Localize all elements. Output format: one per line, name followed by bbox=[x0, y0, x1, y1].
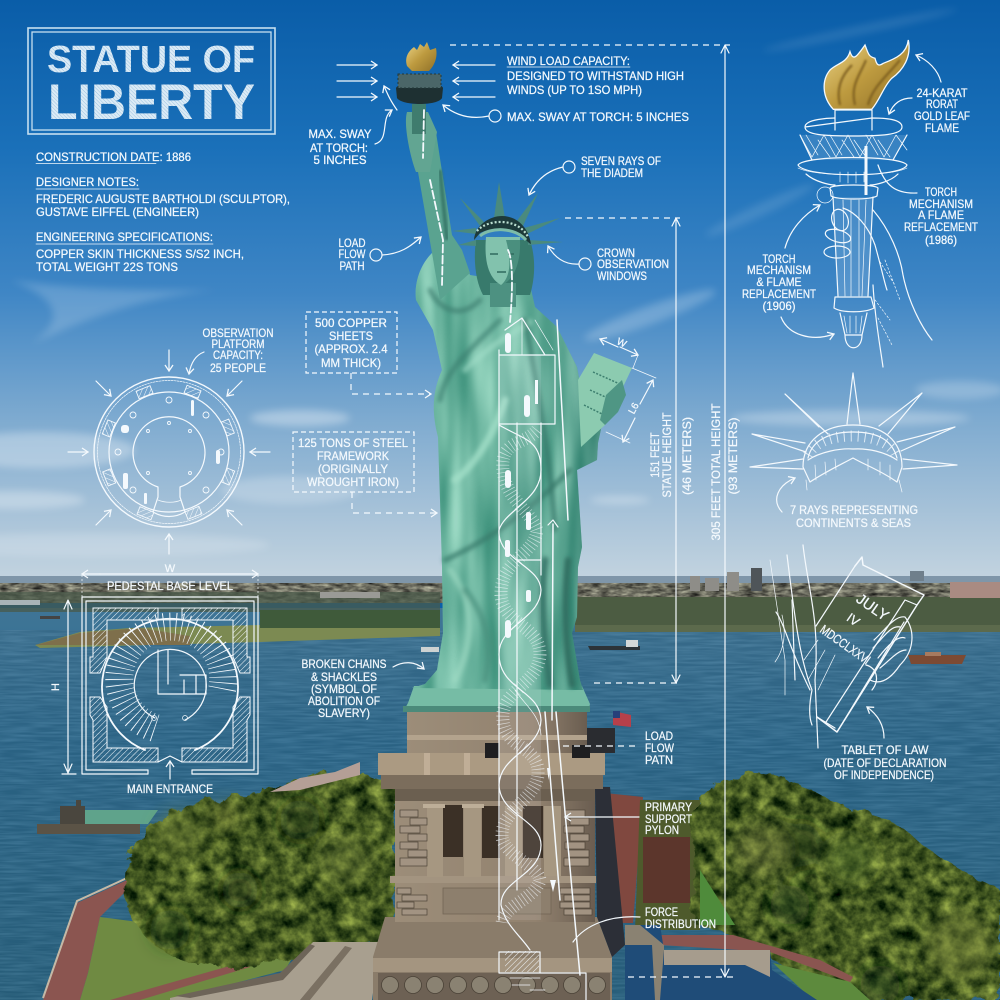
total height dimension: (93 METERS) bbox=[726, 418, 740, 494]
trees left bbox=[124, 772, 395, 968]
face bbox=[486, 237, 520, 285]
tablet label: (DATE OF DECLARATION bbox=[824, 756, 946, 770]
distant hills bbox=[0, 576, 1000, 584]
gold leaf label: RORAT bbox=[926, 97, 959, 111]
pedestal load flow label: FLOW bbox=[645, 741, 675, 755]
body and drapery bbox=[412, 250, 603, 690]
lawn left bbox=[80, 917, 300, 1000]
frame lines bbox=[499, 318, 555, 920]
tablet inscription bbox=[817, 590, 892, 667]
tablet label bbox=[824, 707, 946, 782]
crown windows callout: WINDOWS bbox=[597, 269, 647, 283]
sway callout left bbox=[308, 86, 397, 167]
clouds bbox=[0, 5, 1000, 557]
spiral stairs bbox=[501, 430, 540, 925]
copper sheets callout bbox=[306, 312, 431, 394]
pedestal base plan: PEDESTAL BASE LEVEL bbox=[107, 579, 233, 593]
foreground left: pier bbox=[37, 800, 158, 834]
steps left bbox=[170, 942, 380, 1000]
load-marked handle bbox=[864, 146, 868, 195]
mechanism label left: (1906) bbox=[762, 299, 796, 313]
force distribution label: DISTRIBUTION bbox=[645, 917, 716, 931]
primary support pylon label: SUPPORT bbox=[645, 812, 693, 826]
copper sheets callout: MM THICK) bbox=[321, 356, 381, 370]
rays bbox=[750, 373, 957, 469]
load flow callout: PATH bbox=[340, 259, 364, 273]
title text: STATUE OF bbox=[47, 39, 255, 81]
diadem rays callout: SEVEN RAYS OF bbox=[581, 154, 661, 168]
load flow callout: FLOW bbox=[338, 247, 366, 261]
balcony bbox=[378, 753, 605, 775]
gold leaf label: GOLD LEAF bbox=[914, 109, 970, 123]
flag bbox=[613, 711, 631, 727]
statue height dimension: STATUE HEIGHT bbox=[660, 412, 674, 498]
steel framework callout: 125 TONS OF STEEL bbox=[298, 436, 408, 450]
crown sketch bbox=[750, 373, 957, 530]
hand bbox=[406, 112, 437, 172]
primary support pylon label: PRIMARY bbox=[645, 800, 692, 814]
sway callout left: AT TORCH: bbox=[310, 141, 368, 155]
copper sheets callout: SHEETS bbox=[329, 329, 373, 343]
plan walls bbox=[82, 597, 258, 774]
neck bbox=[490, 283, 516, 307]
height dimension bbox=[50, 600, 76, 774]
tablet inscription: MDCCLXXVI bbox=[817, 622, 873, 667]
mechanism label left: & FLAME bbox=[756, 275, 802, 289]
foreground right: plaza bbox=[605, 793, 643, 923]
raised arm bbox=[418, 132, 470, 300]
gold leaf label: 24-KARAT bbox=[916, 86, 968, 100]
lawn right bbox=[700, 870, 735, 925]
figures bbox=[505, 333, 538, 638]
pedestal base bbox=[373, 917, 612, 1000]
title text: LIBERTY bbox=[48, 74, 255, 130]
tablet bbox=[578, 353, 632, 447]
statue height dimension: 151 FEET bbox=[648, 432, 662, 478]
load flow callout bbox=[338, 236, 421, 273]
pedestal load flow label bbox=[563, 729, 675, 767]
rusticated quoins bbox=[397, 810, 592, 915]
mechanism label left: REPLACEMENT bbox=[742, 287, 817, 301]
torch body lines bbox=[798, 110, 907, 348]
mechanism label right bbox=[878, 165, 979, 247]
diadem rays callout: THE DIADEM bbox=[581, 166, 643, 180]
statue height dimension: (46 METERS) bbox=[680, 417, 694, 495]
ships bbox=[40, 616, 966, 664]
columns and windows bbox=[443, 805, 463, 857]
copper fold texture bbox=[412, 250, 603, 690]
tablet inscription: IV bbox=[844, 610, 863, 629]
gold leaf label: FLAME bbox=[925, 121, 959, 135]
translucent shaft bbox=[499, 355, 541, 920]
gold leaf label bbox=[889, 55, 970, 135]
force distribution label: FORCE bbox=[645, 905, 678, 919]
pedestal load flow label: LOAD bbox=[645, 729, 673, 743]
crown label bbox=[777, 478, 918, 530]
circular stairs bbox=[102, 619, 238, 750]
wind load callout: MAX. SWAY AT TORCH: 5 INCHES bbox=[507, 110, 689, 124]
observation platform plan bbox=[68, 326, 274, 554]
diadem rays callout bbox=[529, 154, 661, 195]
left island bbox=[35, 625, 440, 648]
water bbox=[0, 608, 1000, 1000]
pedestal base plan bbox=[50, 563, 258, 796]
tablet sketch bbox=[770, 545, 946, 782]
hand sketch bbox=[824, 207, 932, 367]
mechanism label right: (1986) bbox=[925, 233, 957, 247]
torch flame bbox=[406, 42, 437, 71]
wind load callout: WINDS (UP TO 1SO MPH) bbox=[507, 83, 642, 97]
steel framework callout: WROUGHT IRON) bbox=[307, 475, 399, 489]
torch sketch bbox=[742, 40, 979, 367]
project notes: DESIGNER NOTES: bbox=[36, 175, 139, 189]
platform segments bbox=[102, 385, 235, 520]
far shore and city bbox=[0, 583, 1000, 603]
wind load callout: WIND LOAD CAPACITY: bbox=[507, 54, 630, 68]
steel framework callout: (ORIGINALLY bbox=[318, 462, 388, 476]
load path bbox=[545, 320, 568, 900]
copper sheets callout: 500 COPPER bbox=[315, 316, 387, 330]
tablet dimensions bbox=[600, 336, 656, 443]
upper block bbox=[407, 712, 587, 754]
title frame bbox=[28, 28, 275, 134]
pedestal bbox=[373, 711, 631, 1000]
crown label: CONTINENTS & SEAS bbox=[796, 516, 911, 530]
crown windows callout: OBSERVATION bbox=[597, 257, 669, 271]
primary support pylon label bbox=[565, 800, 693, 837]
project notes bbox=[36, 150, 290, 274]
wind arrows left bbox=[337, 65, 377, 97]
band bbox=[803, 425, 902, 482]
mechanism label right: TORCH bbox=[925, 185, 957, 199]
observation platform plan: 25 PEOPLE bbox=[210, 361, 266, 375]
mechanism label right: REFLACEMENT bbox=[904, 220, 979, 234]
mechanism label right: A FLAME bbox=[918, 208, 964, 222]
observation platform plan: PLATFORM bbox=[212, 337, 264, 351]
island buildings left bbox=[270, 762, 360, 792]
shaft bbox=[395, 787, 595, 922]
observation platform plan: CAPACITY: bbox=[213, 348, 263, 362]
project notes: TOTAL WEIGHT 22S TONS bbox=[36, 260, 178, 274]
carved stone spheres bbox=[382, 976, 606, 994]
height dimension: H bbox=[50, 683, 62, 691]
broken chains callout: (SYMBOL OF bbox=[311, 682, 377, 696]
head bbox=[452, 182, 563, 307]
radial arrows bbox=[68, 350, 270, 554]
broken chains callout: SLAVERY) bbox=[318, 706, 370, 720]
pedestal base plan: W bbox=[165, 563, 176, 575]
primary support pylon label: PYLON bbox=[645, 823, 679, 837]
statue height dimension bbox=[565, 218, 694, 683]
project notes: ENGINEERING SPECIFICATIONS: bbox=[36, 230, 213, 244]
copper sheets callout: (APPROX. 2.4 bbox=[314, 342, 388, 356]
tablet label: OF INDEPENDENCE) bbox=[834, 768, 934, 782]
mechanism label left bbox=[742, 205, 834, 337]
torch handle bbox=[412, 104, 426, 134]
internal structure overlay bbox=[423, 110, 586, 1000]
drapery folds bbox=[430, 290, 572, 685]
fingers bbox=[866, 617, 912, 690]
broken chains callout: & SHACKLES bbox=[311, 670, 377, 684]
wind load callout: DESIGNED TO WITHSTAND HIGH bbox=[507, 69, 684, 83]
tablet dimensions: L6 bbox=[627, 401, 642, 416]
broken chains callout bbox=[302, 657, 424, 720]
gold flame bbox=[824, 40, 909, 109]
crown windows callout bbox=[548, 246, 669, 283]
project notes: GUSTAVE EIFFEL (ENGINEER) bbox=[36, 205, 199, 219]
statue base bbox=[403, 686, 590, 712]
crown rays bbox=[452, 182, 563, 246]
tablet inscription: JULY bbox=[853, 590, 892, 625]
broken chains callout: ABOLITION OF bbox=[308, 694, 380, 708]
mechanism label left: MECHANISM bbox=[747, 263, 811, 277]
steps right bbox=[625, 925, 817, 1000]
robe folds bbox=[770, 545, 835, 748]
load flow callout: LOAD bbox=[338, 236, 366, 250]
mechanism label left: TORCH bbox=[762, 252, 796, 266]
torch platform bbox=[396, 82, 443, 104]
foundation bbox=[499, 952, 586, 1000]
broken chains callout: BROKEN CHAINS bbox=[302, 657, 386, 671]
trees right bbox=[690, 773, 1000, 1000]
statue bbox=[396, 42, 632, 712]
sway callout left: 5 INCHES bbox=[314, 153, 366, 167]
crown windows callout: CROWN bbox=[597, 246, 635, 260]
project notes: CONSTRUCTION DATE: 1886 bbox=[36, 150, 191, 164]
tablet outline bbox=[817, 557, 924, 732]
observation platform plan: OBSERVATION bbox=[202, 326, 274, 340]
sky bbox=[0, 0, 1000, 585]
project notes: COPPER SKIN THICKNESS S/S2 INCH, bbox=[36, 247, 244, 261]
wind load callout bbox=[443, 54, 689, 124]
diadem bbox=[474, 216, 531, 244]
sway callout left: MAX. SWAY bbox=[308, 127, 372, 141]
tablet dimensions: W bbox=[615, 336, 628, 351]
visitors bbox=[121, 400, 220, 504]
steel framework callout bbox=[293, 432, 437, 513]
project notes: FREDERIC AUGUSTE BARTHOLDI (SCULPTOR), bbox=[36, 192, 290, 206]
pedestal load flow label: PATN bbox=[645, 753, 673, 767]
title text bbox=[47, 39, 255, 130]
total height dimension bbox=[450, 45, 740, 977]
base panel bbox=[443, 888, 551, 914]
title block bbox=[28, 28, 275, 134]
steel framework callout: FRAMEWORK bbox=[317, 449, 389, 463]
force distribution label bbox=[573, 905, 716, 942]
total height dimension: 305 FEET TOTAL HEIGHT bbox=[709, 403, 723, 540]
tablet label: TABLET OF LAW bbox=[842, 743, 929, 757]
plan rings bbox=[94, 377, 244, 527]
hair bbox=[475, 240, 534, 295]
mechanism label right: MECHANISM bbox=[909, 197, 973, 211]
pedestal base plan: MAIN ENTRANCE bbox=[127, 782, 213, 796]
walkway left bbox=[43, 880, 127, 1000]
crown label: 7 RAYS REPRESENTING bbox=[790, 503, 918, 517]
